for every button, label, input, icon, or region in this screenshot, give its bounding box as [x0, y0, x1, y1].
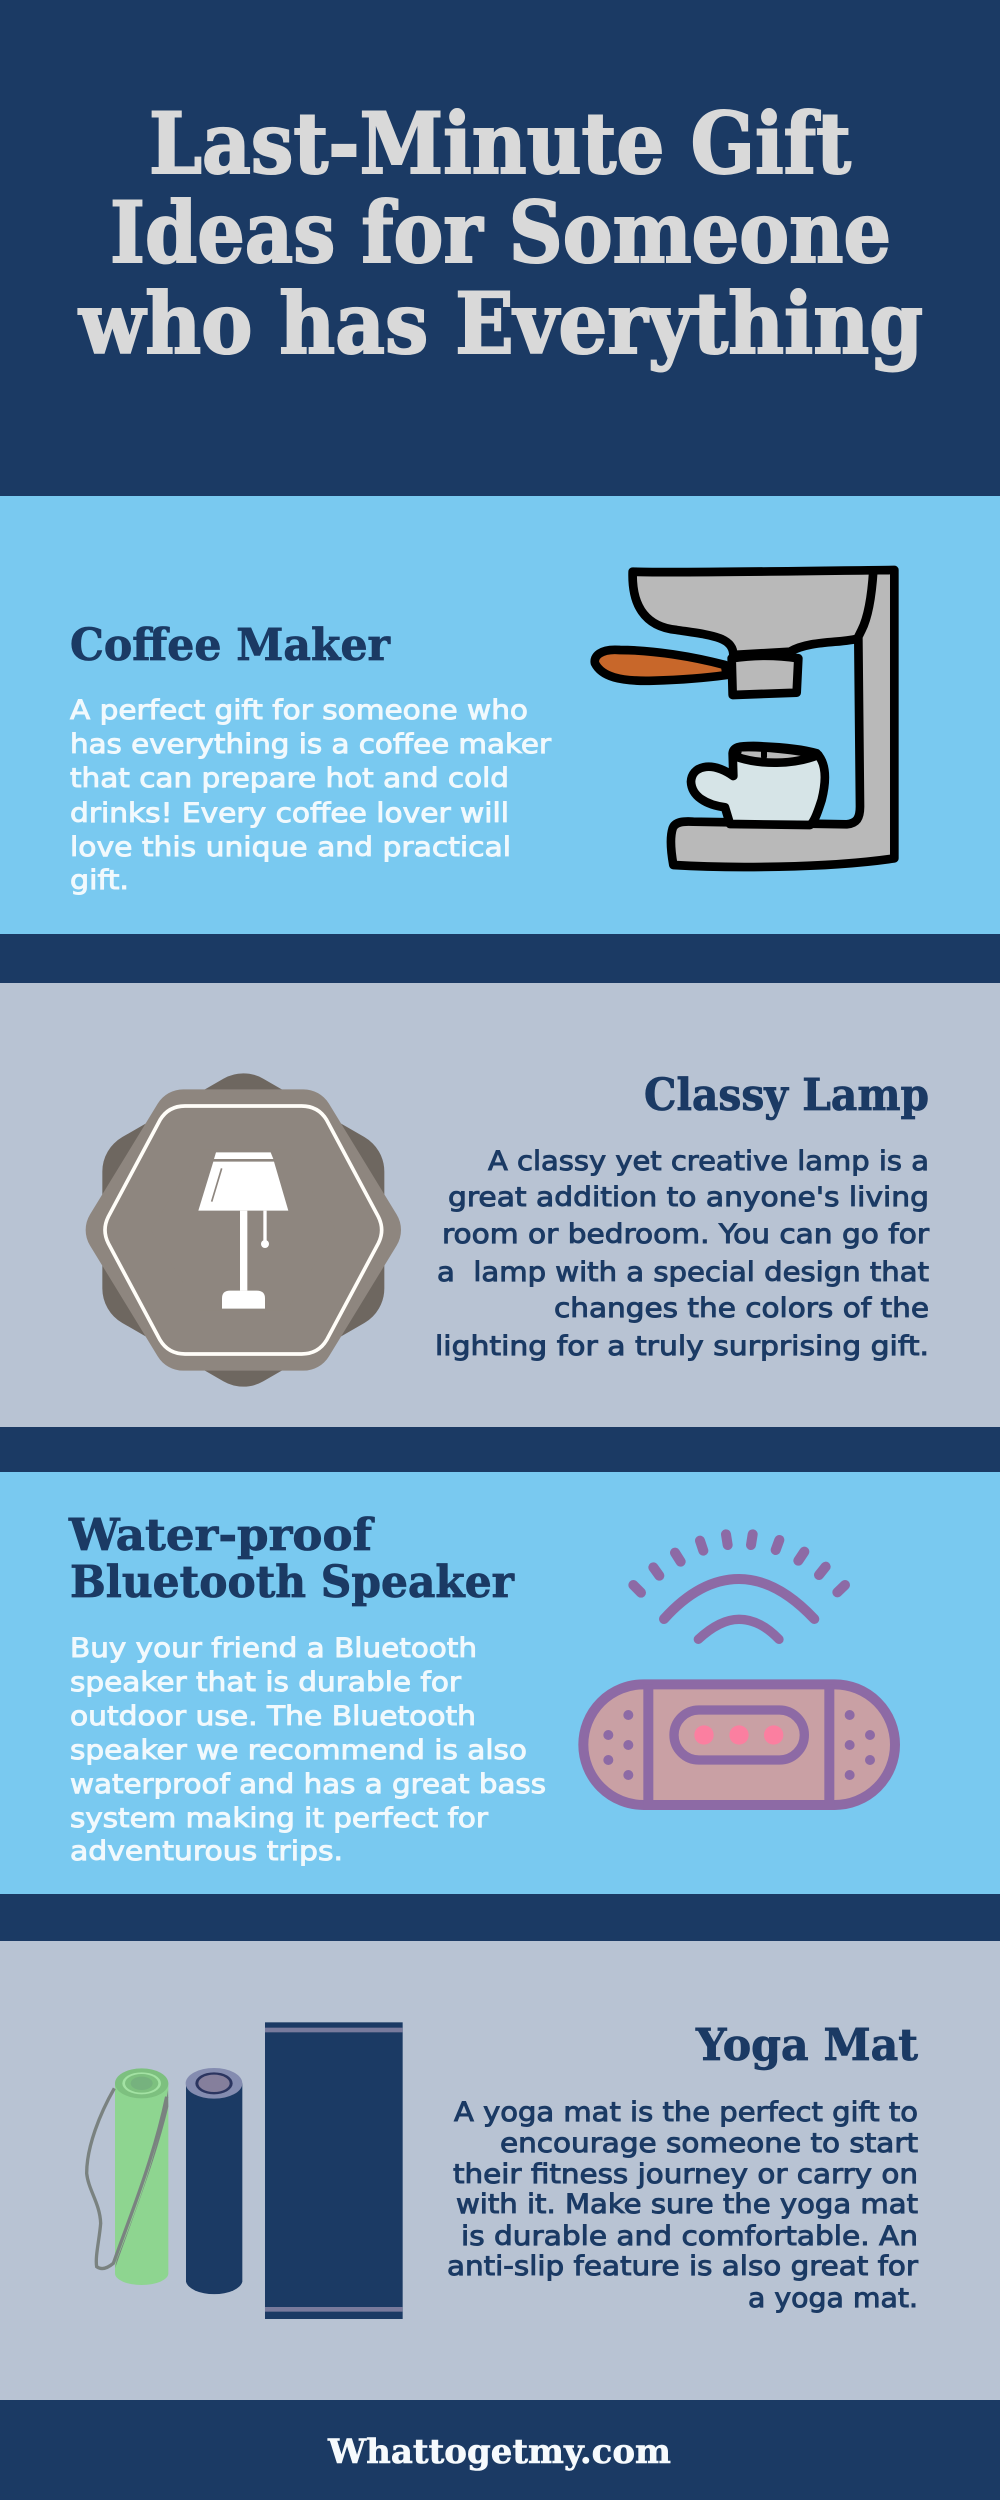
panel: classy lamp — [0, 983, 1000, 1427]
heading: yoga mat: Yoga Mat — [695, 2020, 919, 2071]
icon: speaker — [583, 1534, 895, 1805]
panel: coffee maker — [0, 496, 1000, 934]
text block: bluetooth speaker: waterproof and has a great bass — [70, 1769, 546, 1800]
text block: coffee maker: drinks! Every coffee lover will — [70, 798, 509, 829]
icon: yoga mats — [87, 2022, 403, 2319]
text block: coffee maker: love this unique and practical — [70, 832, 511, 863]
icon: coffee machine — [595, 570, 894, 867]
panel: bluetooth speaker — [0, 1472, 1000, 1894]
heading: classy lamp: Classy Lamp — [644, 1070, 929, 1121]
text block: coffee maker: that can prepare hot and cold — [70, 763, 509, 794]
text block: yoga mat: a yoga mat. — [748, 2283, 918, 2314]
heading: bluetooth speaker: Water-proof — [68, 1510, 375, 1561]
green rolled mat — [87, 2068, 168, 2285]
title: Last-Minute Gift — [149, 94, 851, 193]
title: Ideas for Someone — [110, 183, 891, 282]
text block: yoga mat — [447, 2097, 919, 2314]
navy rolled mat — [186, 2068, 242, 2294]
text block: coffee maker — [70, 695, 552, 896]
text block: classy lamp: a lamp with a special design that — [437, 1257, 929, 1288]
text block: bluetooth speaker: adventurous trips. — [70, 1836, 343, 1867]
panel: yoga mat — [0, 1941, 1000, 2400]
footer: Whattogetmy.com — [327, 2432, 671, 2472]
text block: coffee maker: A perfect gift for someone who — [70, 695, 528, 726]
heading: bluetooth speaker: Bluetooth Speaker — [70, 1557, 515, 1608]
text block: bluetooth speaker: speaker we recommend is also — [70, 1735, 527, 1766]
title: who has Everything — [78, 274, 923, 373]
text block: coffee maker: has everything is a coffee maker — [70, 729, 552, 760]
text block: yoga mat: encourage someone to start — [500, 2128, 918, 2159]
text block: yoga mat: with it. Make sure the yoga mat — [456, 2189, 918, 2220]
text block: classy lamp: A classy yet creative lamp is a — [488, 1146, 929, 1177]
heading: coffee maker: Coffee Maker — [70, 620, 391, 671]
flat navy mat — [265, 2022, 403, 2319]
text block: bluetooth speaker: Buy your friend a Bluetooth — [70, 1633, 477, 1664]
heading: bluetooth speaker — [68, 1510, 515, 1608]
text block: bluetooth speaker — [70, 1633, 546, 1867]
text block: yoga mat: their fitness journey or carry on — [453, 2159, 918, 2190]
text block: classy lamp: lighting for a truly surprising gift. — [435, 1331, 929, 1362]
title — [78, 94, 923, 373]
text block: coffee maker: gift. — [70, 865, 129, 896]
text block: classy lamp: great addition to anyone's living — [448, 1182, 929, 1213]
text block: classy lamp — [435, 1146, 930, 1362]
icon: lamp badge — [105, 1106, 382, 1354]
text block: yoga mat: is durable and comfortable. An — [461, 2221, 918, 2252]
text block: yoga mat: anti-slip feature is also great for — [447, 2251, 919, 2282]
text block: bluetooth speaker: system making it perfect for — [70, 1803, 489, 1834]
text block: classy lamp: changes the colors of the — [554, 1293, 929, 1324]
text block: bluetooth speaker: speaker that is durable for — [70, 1667, 462, 1698]
text block: yoga mat: A yoga mat is the perfect gift to — [454, 2097, 918, 2128]
text block: bluetooth speaker: outdoor use. The Bluetooth — [70, 1701, 476, 1732]
text block: classy lamp: room or bedroom. You can go for — [442, 1219, 930, 1250]
